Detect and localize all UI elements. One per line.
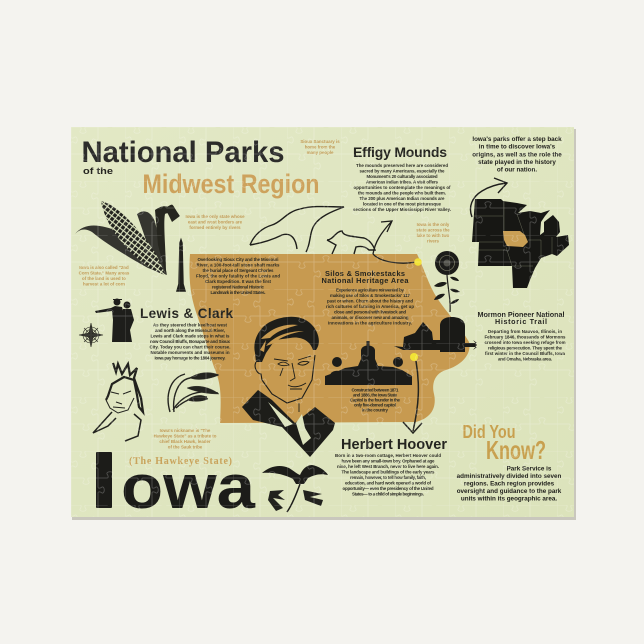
note: Hawkeye nickname: Iowa's nickname is "The (160, 428, 211, 433)
heading: Silos & Smokestacks: Silos & Smokestacks (325, 269, 405, 278)
text: Floyd monument (196, 257, 280, 295)
icon: Lewis and Clark silhouettes (95, 298, 134, 342)
puzzle board (71, 127, 576, 520)
text: Capitol description: in the country (362, 408, 389, 412)
text: Herbert Hoover description: education, and hard work opened a world of (345, 480, 432, 486)
icon: Iowa state seal eagle (262, 465, 328, 512)
text: intro to Iowa's parks: Iowa's parks offer a step back (472, 136, 562, 143)
note: two rivers: state across the (416, 228, 450, 232)
note: Hawkeye nickname (154, 428, 217, 450)
text: Lewis and Clark description: Lewis and Clark made stops in what is (150, 334, 230, 338)
text: Lewis and Clark description (150, 322, 231, 360)
text: Mormon Pioneer description: first winter in the Council Bluffs, Iowa (485, 351, 566, 356)
puzzle piece texture overlay (71, 127, 574, 517)
text: Mormon Pioneer heading: Historic Trail (495, 317, 547, 326)
text: Mormon Pioneer heading (478, 310, 564, 326)
subtitle: The Hawkeye State: (The Hawkeye State) (129, 456, 232, 467)
text: Herbert Hoover description: Born in a two-room cottage, Herbert Hoover could (335, 453, 441, 458)
text: Silos description: animals, or discover new and amazing (332, 315, 409, 320)
text: Silos description (326, 288, 414, 326)
heading: Iowa: owa (121, 453, 256, 522)
icon: barn and silo (394, 317, 477, 352)
heading: Did You Know?: Know? (486, 435, 546, 465)
text: Silos description: close and personal with livestock and (334, 310, 406, 314)
note: Hawkeye nickname: chief Black Hawk, leader (159, 439, 211, 444)
note: rivers borders: Iowa is the only state whose (185, 214, 245, 219)
text: Capitol description: and 1886, the Iowa State (353, 392, 398, 398)
note: rivers borders (185, 214, 245, 230)
text: Lewis and Clark description: Iowa pay homage to the 1804 journey. (154, 356, 226, 360)
text: Effigy Mounds description: opportunities to contemplate the meanings of (354, 185, 451, 190)
text: Effigy Mounds description: American Indian tribes. A visit offers (366, 180, 439, 184)
note: Hawkeye nickname: of the Sauk tribe (168, 444, 203, 450)
text: Capitol description (350, 388, 401, 412)
subtitle: of the: of the (83, 166, 113, 176)
text: Floyd monument: the burial place of Sergeant Charles (202, 268, 274, 273)
text: Did You Know description: Park Service is (507, 466, 552, 472)
text: Lewis and Clark description: As they steered their keelboat west (153, 322, 228, 328)
icon: yellow marker top (414, 258, 422, 266)
arrow: yellow marker to Herbert Hoover (403, 353, 422, 433)
text: Mormon Pioneer description: and Omaha, Nebraska area. (498, 356, 552, 362)
text: Effigy Mounds description: located in one of the most picturesque (363, 202, 442, 206)
heading: Silos & Smokestacks (322, 269, 409, 285)
text: intro to Iowa's parks: in time to discover Iowa's (479, 144, 556, 150)
note: many people: Sioux Sanctuary is (300, 139, 340, 144)
icon: effigy bird mound outline (250, 206, 344, 252)
portrait: Herbert Hoover (242, 317, 335, 457)
text: Did You Know description: units within its geographic area. (461, 496, 557, 502)
note: many people (300, 139, 340, 155)
text: Floyd monument: registered National Historic (212, 284, 265, 290)
map highlight: Iowa (503, 231, 528, 247)
note: corn state: Iowa is also called "2nd (79, 265, 129, 270)
text: Did You Know description: administratively divided into seven (457, 473, 561, 480)
text: Herbert Hoover description: States— to a child of simple beginnings. (352, 492, 424, 496)
heading: Did You Know?: Did You (462, 422, 516, 442)
text: Floyd monument: Clark Expedition. It was the first (205, 279, 272, 284)
heading: Herbert Hoover: Herbert Hoover (341, 437, 447, 453)
text: Herbert Hoover description: nine, he left West Branch, never to live here again. (337, 464, 439, 469)
text: Did You Know description (457, 466, 562, 502)
icon: effigy bear mound outline (327, 231, 375, 254)
text: Effigy Mounds description: The mounds preserved here are considered (356, 163, 448, 168)
text: Silos description: Experience agriculture reinvented by (336, 288, 405, 292)
text: Herbert Hoover description (335, 453, 441, 496)
note: rivers borders: east and west borders are (188, 220, 243, 224)
icon: corn cob (75, 201, 180, 275)
text: intro to Iowa's parks (472, 136, 562, 174)
text: Mormon Pioneer description: Departing from Nauvoo, Illinois, in (488, 329, 562, 334)
icon: Iowa State Capitol (325, 341, 412, 385)
title: National Parks: National Parks (82, 136, 284, 169)
note: two rivers: lake to with two (417, 233, 450, 238)
note: many people: home from the (305, 144, 336, 150)
note: many people: many people (307, 150, 334, 155)
text: Floyd monument: Floyd, the only fatality of the Lewis and (196, 274, 280, 278)
text: Silos description: making use of Silos & Smokestacks' 117 (330, 293, 411, 298)
subtitle: Midwest Region: Midwest Region (142, 169, 320, 199)
text: Floyd monument: Landmark in the United States. (210, 290, 266, 295)
text: Mormon Pioneer description: February 1846, thousands of Mormons (484, 334, 566, 340)
icon: sunflower (434, 251, 460, 312)
text: Silos description: rich cultures of farming in America, get up (326, 304, 414, 309)
text: Herbert Hoover description: The landscape and buildings of the early years (342, 470, 435, 474)
arrow: to midwest map (470, 178, 507, 217)
note: corn state: of the land is used to (82, 276, 126, 281)
text: Mormon Pioneer heading: Mormon Pioneer National (478, 310, 564, 319)
note: rivers borders: formed entirely by rivers (189, 225, 241, 230)
text: intro to Iowa's parks: of our nation. (497, 166, 537, 174)
text: intro to Iowa's parks: state played in the history (478, 159, 556, 166)
text: Mormon Pioneer description: crossed into Iowa seeking refuge from (484, 340, 566, 345)
heading: Lewis & Clark: Lewis & Clark (140, 306, 233, 321)
icon: Chief Mahaska portrait (93, 363, 143, 441)
panel: Iowa state map (189, 254, 470, 423)
text: Silos description: innovations in the agriculture industry. (328, 320, 412, 326)
note: two rivers (416, 222, 450, 244)
text: Floyd monument: River, a 100-foot-tall stone shaft marks (196, 262, 280, 268)
text: Herbert Hoover description: have been any small-town boy. Orphaned at age (342, 458, 435, 464)
note: corn state: harvest a lot of corn (83, 282, 125, 286)
note: corn state (79, 265, 130, 286)
note: two rivers: rivers (427, 238, 440, 244)
heading: Silos & Smokestacks: National Heritage Area (322, 276, 409, 285)
text: Herbert Hoover description: remain, however, to tell how family, faith, (350, 475, 426, 480)
icon: compass rose (79, 323, 103, 347)
heading: Did You Know? (462, 422, 546, 465)
text: Effigy Mounds description: Monument's 20 culturally associated (366, 174, 438, 179)
note: corn state: Corn State." Many areas (79, 270, 130, 276)
text: Silos description: past or when. Churn about the history and (327, 298, 413, 304)
text: Effigy Mounds description: The 200 plus American Indian mounds are (360, 196, 445, 201)
text: Mormon Pioneer description: religious persecution. They spent the (488, 346, 563, 350)
heading: Effigy Mounds: Effigy Mounds (353, 144, 447, 160)
text: Capitol description: only five-domed capitol (354, 402, 396, 408)
text: Lewis and Clark description: Notable monuments and museums in (150, 350, 230, 355)
text: Capitol description: Constructed between 1871 (352, 388, 399, 392)
text: Lewis and Clark description: and north along the Missouri River, (155, 328, 225, 333)
text: Mormon Pioneer description (484, 329, 566, 362)
text: Effigy Mounds description: sacred by many Americans, especially the (360, 168, 445, 174)
note: Hawkeye nickname: Hawkeye State" as a tribute to (154, 434, 217, 438)
text: Did You Know description: oversight and guidance to the park (457, 488, 562, 495)
text: Effigy Mounds description: sections of the Upper Mississippi River Valley. (353, 207, 451, 212)
note: two rivers: Iowa is the only (417, 222, 450, 227)
text: Capitol description: Capitol is the founder in the (350, 398, 401, 402)
text: Lewis and Clark description: City. Today you can chart their course. (150, 344, 230, 350)
icon: wheat stalks (168, 373, 219, 412)
text: Effigy Mounds description: the mounds and the people who built them. (358, 190, 446, 196)
arrow: to Effigy Mounds (373, 221, 416, 263)
text: Did You Know description: regions. Each region provides (464, 480, 555, 488)
icon: Floyd monument obelisk (177, 240, 185, 291)
map: midwest region states (472, 199, 569, 288)
text: Herbert Hoover description: opportunity— even the presidency of the United (342, 486, 434, 491)
text: intro to Iowa's parks: origins, as well as the role the (472, 152, 562, 158)
text: Lewis and Clark description: now Council Bluffs, Bonaparte and Sioux (150, 339, 231, 344)
text: Floyd monument: Overlooking Sioux City and the Missouri (198, 257, 278, 262)
text: Effigy Mounds description (353, 163, 451, 212)
